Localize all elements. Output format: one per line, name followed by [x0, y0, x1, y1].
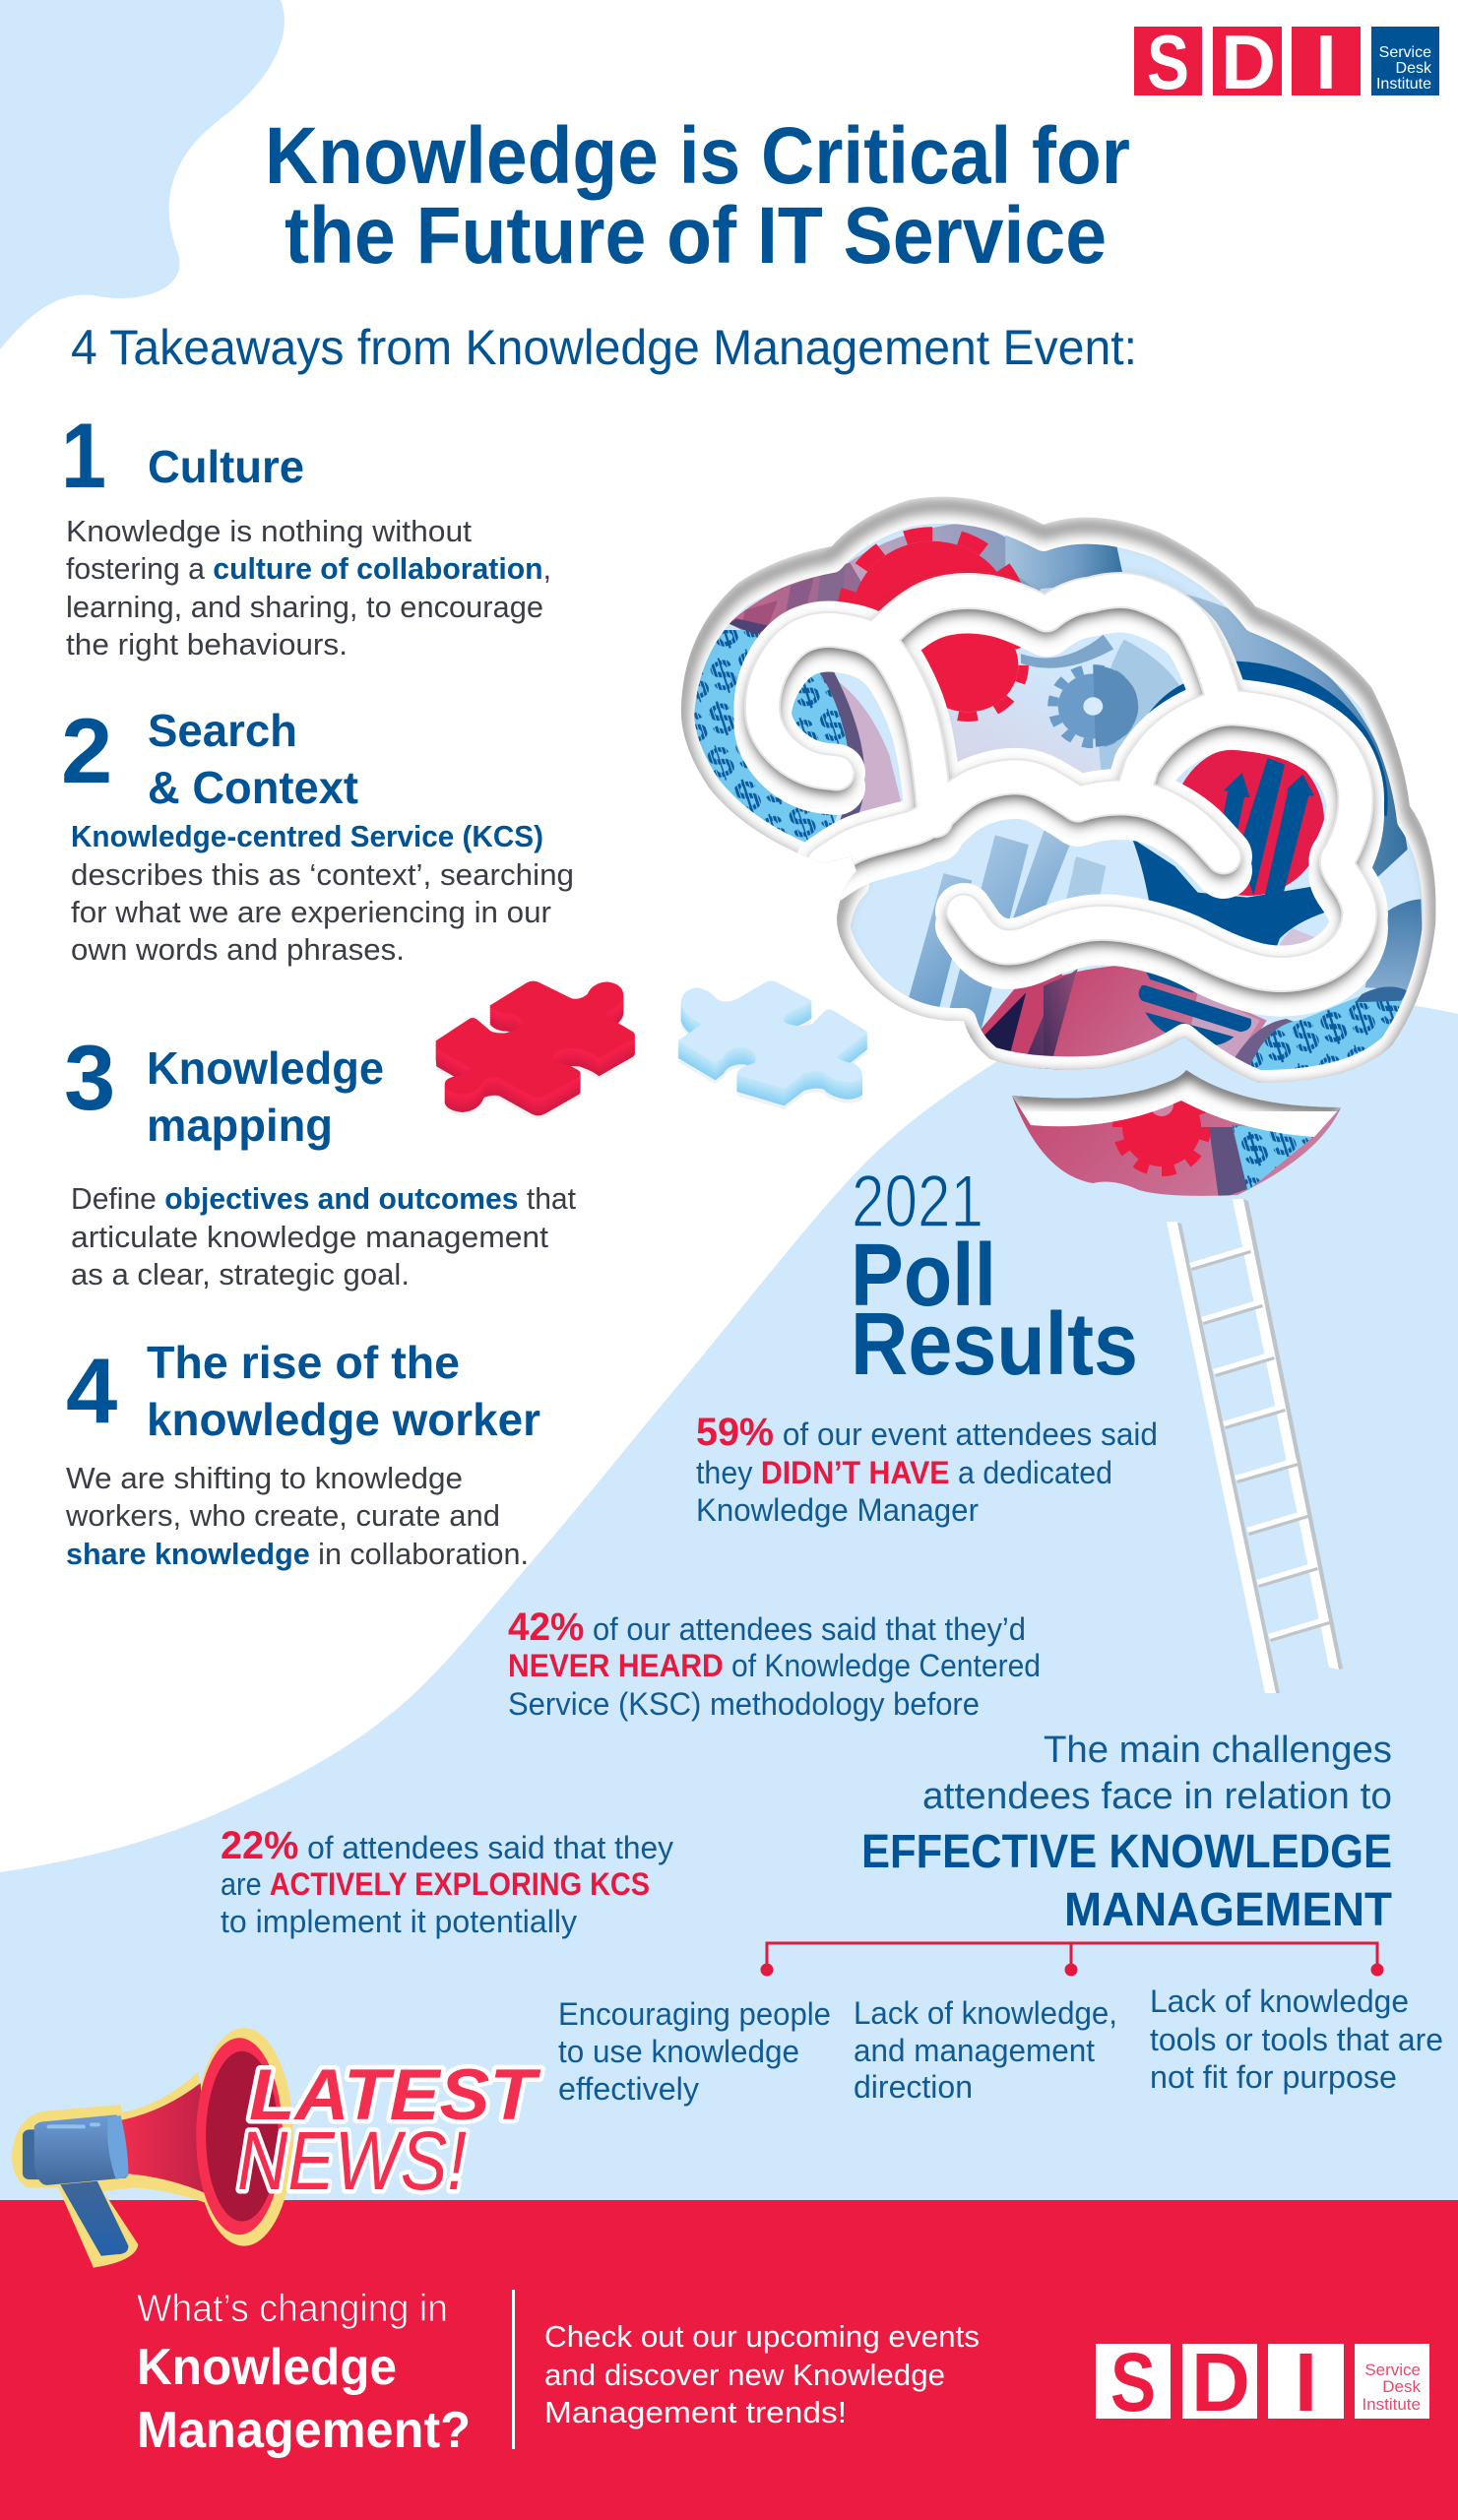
heading: main challenges: The main challenges — [1044, 1730, 1392, 1771]
challenge: lack of tools — [1150, 1984, 1443, 2095]
icon: megaphone — [12, 2028, 293, 2268]
logo: SDI top: D — [1221, 19, 1276, 105]
takeaway 2: search and context: describes this as ‘context’, searching — [71, 857, 574, 892]
latest news badge — [237, 2055, 541, 2207]
poll stat: 22%: are ACTIVELY EXPLORING KCS — [221, 1866, 650, 1902]
takeaway 4: rise of the knowledge worker: We are shifting to knowledge — [66, 1461, 463, 1495]
icon: brain illustration — [669, 482, 1447, 1206]
challenge: lack of tools: Lack of knowledge — [1150, 1984, 1409, 2019]
challenge: lack of knowledge and direction: Lack of knowledge, — [854, 1995, 1117, 2031]
icon: blue puzzle piece — [677, 980, 868, 1109]
footer band — [0, 2200, 1458, 2520]
challenge: lack of knowledge and direction — [854, 1995, 1117, 2105]
takeaway 2: search and context: for what we are experiencing in our — [71, 895, 551, 929]
challenge: lack of tools: not fit for purpose — [1150, 2059, 1397, 2095]
takeaway 3: knowledge mapping — [64, 1026, 576, 1292]
heading: main challenges: MANAGEMENT — [1064, 1884, 1392, 1936]
poll stat: 59% — [696, 1411, 1158, 1528]
challenge: encouraging people: Encouraging people — [558, 1996, 831, 2032]
takeaway 4: rise of the knowledge worker: 4 — [66, 1339, 117, 1442]
latest news badge: NEWS! — [237, 2114, 467, 2207]
challenge: lack of knowledge and direction: and management — [854, 2033, 1095, 2068]
takeaway 1: culture — [61, 404, 551, 662]
brain cerebellum window — [1012, 1070, 1341, 1196]
takeaway 2: search and context: own words and phrases. — [71, 932, 405, 967]
connector: challenges tree — [762, 1943, 1382, 1975]
heading: 2021 poll results: Results — [851, 1295, 1138, 1394]
takeaway 4: rise of the knowledge worker: The rise of the — [147, 1337, 460, 1388]
takeaway 3: knowledge mapping: Define objectives and outcomes that — [71, 1181, 576, 1216]
challenge: lack of knowledge and direction: direction — [854, 2069, 973, 2105]
takeaway 2: search and context — [61, 699, 574, 967]
takeaway 4: rise of the knowledge worker: knowledge worker — [147, 1394, 540, 1445]
takeaway 2: search and context: Search — [148, 705, 297, 756]
takeaway 1: culture: Culture — [148, 441, 304, 492]
footer heading: Management? — [137, 2402, 471, 2459]
takeaway 3: knowledge mapping: mapping — [147, 1100, 333, 1151]
footer heading: What’s changing in — [137, 2288, 448, 2330]
takeaway 1: culture: 1 — [61, 404, 106, 507]
takeaway 4: rise of the knowledge worker: workers, who create, curate and — [65, 1498, 500, 1533]
poll stat: 22% — [221, 1824, 673, 1939]
takeaway 3: knowledge mapping: Knowledge — [147, 1042, 384, 1094]
logo: SDI footer — [1096, 2336, 1429, 2428]
challenge: encouraging people: effectively — [558, 2071, 699, 2107]
poll stat: 42%: 42% of our attendees said that they’d — [508, 1606, 1026, 1649]
icon: ladder — [1167, 1199, 1343, 1693]
title: Knowledge is Critical for — [265, 111, 1130, 201]
takeaway 2: search and context: & Context — [148, 762, 358, 813]
takeaway 3: knowledge mapping: 3 — [64, 1026, 115, 1129]
heading: 2021 poll results: Poll — [851, 1227, 996, 1325]
challenge: lack of tools: tools or tools that are — [1150, 2022, 1443, 2057]
logo: SDI footer: Service — [1364, 2361, 1421, 2379]
latest news badge: LATEST — [249, 2055, 541, 2135]
brain folds and shadows — [681, 497, 1435, 1097]
poll stat: 42% — [508, 1606, 1041, 1722]
logo: SDI top: I — [1315, 19, 1337, 105]
footer call to action — [544, 2319, 980, 2429]
heading: 2021 poll results: 2021 — [852, 1160, 983, 1242]
footer call to action: Management trends! — [544, 2395, 847, 2429]
poll stat: 59%: Knowledge Manager — [696, 1492, 979, 1528]
logo: SDI top: Desk — [1396, 60, 1432, 77]
poll stat: 42%: NEVER HEARD of Knowledge Centered — [508, 1648, 1041, 1683]
footer call to action: Check out our upcoming events — [544, 2319, 980, 2354]
heading: main challenges — [861, 1730, 1392, 1936]
challenge: encouraging people: to use knowledge — [558, 2034, 799, 2069]
footer call to action: and discover new Knowledge — [544, 2358, 945, 2392]
takeaway 1: culture: Knowledge is nothing without — [66, 514, 472, 548]
poll stat: 22%: 22% of attendees said that they — [221, 1824, 673, 1867]
takeaway 1: culture: learning, and sharing, to encourage — [66, 590, 543, 624]
logo: SDI footer: S — [1110, 2336, 1156, 2428]
takeaway 3: knowledge mapping: articulate knowledge management — [71, 1220, 548, 1254]
poll stat: 59%: they DIDN’T HAVE a dedicated — [696, 1455, 1112, 1490]
footer heading: Knowledge — [137, 2339, 397, 2396]
logo: SDI footer: Institute — [1362, 2395, 1421, 2414]
challenge: encouraging people — [558, 1996, 831, 2107]
title: the Future of IT Service — [285, 191, 1107, 281]
title — [265, 111, 1130, 281]
takeaway 1: culture: fostering a culture of collaboration, — [66, 551, 551, 586]
logo: SDI top — [1134, 19, 1439, 105]
footer heading — [137, 2288, 471, 2459]
takeaway 4: rise of the knowledge worker: share knowledge in collaboration. — [66, 1537, 529, 1571]
heading: main challenges: EFFECTIVE KNOWLEDGE — [861, 1826, 1392, 1878]
logo: SDI top: Service — [1379, 44, 1431, 61]
takeaway 1: culture: the right behaviours. — [66, 627, 348, 662]
logo: SDI footer: D — [1191, 2336, 1250, 2428]
takeaway 2: search and context: Knowledge-centred Service (KCS) — [71, 819, 543, 853]
poll stat: 22%: to implement it potentially — [221, 1904, 577, 1939]
logo: SDI top: S — [1147, 19, 1189, 105]
takeaway 3: knowledge mapping: as a clear, strategic goal. — [71, 1257, 410, 1292]
icon: red puzzle piece — [436, 981, 635, 1119]
poll stat: 59%: 59% of our event attendees said — [696, 1411, 1158, 1454]
logo: SDI footer: Desk — [1382, 2377, 1421, 2396]
poll stat: 42%: Service (KSC) methodology before — [508, 1686, 980, 1722]
brain upper window — [669, 482, 1447, 1097]
logo: SDI top: Institute — [1376, 76, 1431, 93]
takeaway 4: rise of the knowledge worker — [65, 1337, 540, 1571]
light blue hill background — [0, 996, 1458, 2520]
heading: 2021 poll results — [851, 1160, 1138, 1394]
heading: main challenges: attendees face in relation to — [922, 1776, 1392, 1817]
logo: SDI footer: I — [1295, 2336, 1317, 2428]
takeaway 2: search and context: 2 — [61, 699, 112, 802]
decorative blob top left — [0, 0, 285, 349]
subtitle: 4 Takeaways from Knowledge Management Event: — [71, 320, 1137, 375]
